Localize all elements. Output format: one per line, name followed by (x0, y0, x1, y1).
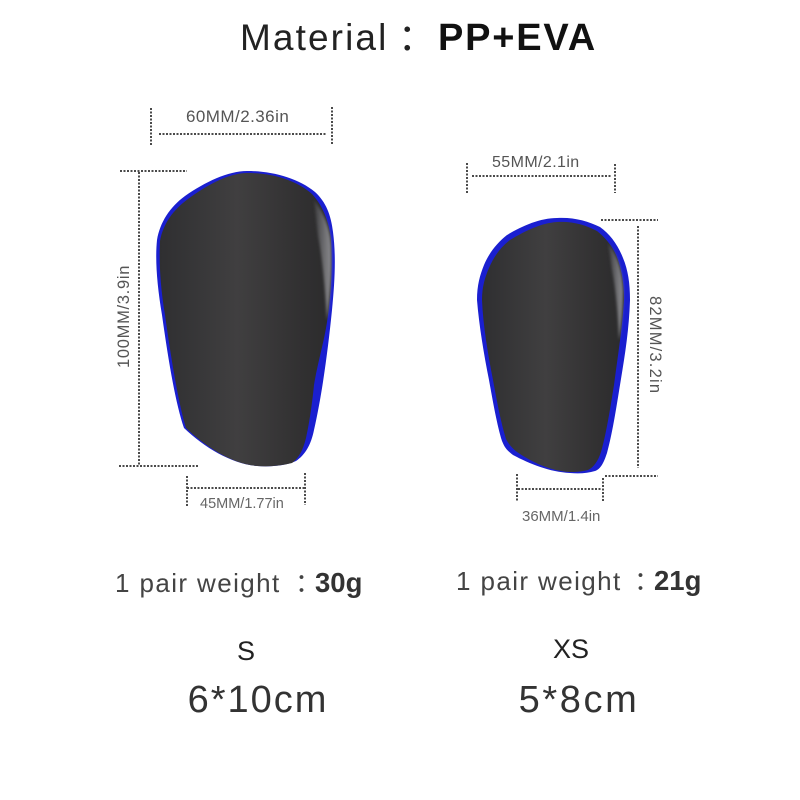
XS weight: ： (634, 566, 661, 596)
XS top width label: 55MM/2.1in (492, 154, 580, 171)
S size dimensions: 6*10cm (188, 679, 328, 721)
S top width dimension (151, 107, 332, 146)
S size diagram (115, 107, 335, 512)
S bottom width label: 45MM/1.77in (200, 496, 284, 512)
XS size diagram (467, 154, 664, 525)
S shin pad (156, 171, 335, 466)
title: material: ： (398, 17, 437, 58)
title: material: PP+EVA (438, 17, 597, 59)
XS size label: XS (553, 634, 589, 664)
XS height dimension (601, 220, 658, 476)
XS weight: 1 pair weight (456, 566, 622, 596)
S size label: S (237, 636, 255, 666)
S weight: 30g (315, 567, 362, 598)
XS height label: 82MM/3.2in (646, 296, 664, 394)
S weight: 1 pair weight (115, 568, 281, 598)
XS weight: 21g (654, 565, 701, 596)
S height dimension (119, 171, 199, 466)
XS shin pad (477, 218, 630, 473)
S top width label: 60MM/2.36in (186, 107, 289, 126)
S height label: 100MM/3.9in (115, 265, 133, 368)
XS bottom width dimension (517, 474, 603, 502)
title: material: Material (240, 17, 388, 58)
S weight: ： (295, 568, 322, 598)
S bottom width dimension (187, 473, 305, 506)
XS top width dimension (467, 163, 615, 193)
XS size dimensions: 5*8cm (519, 679, 639, 721)
XS bottom width label: 36MM/1.4in (522, 508, 600, 525)
